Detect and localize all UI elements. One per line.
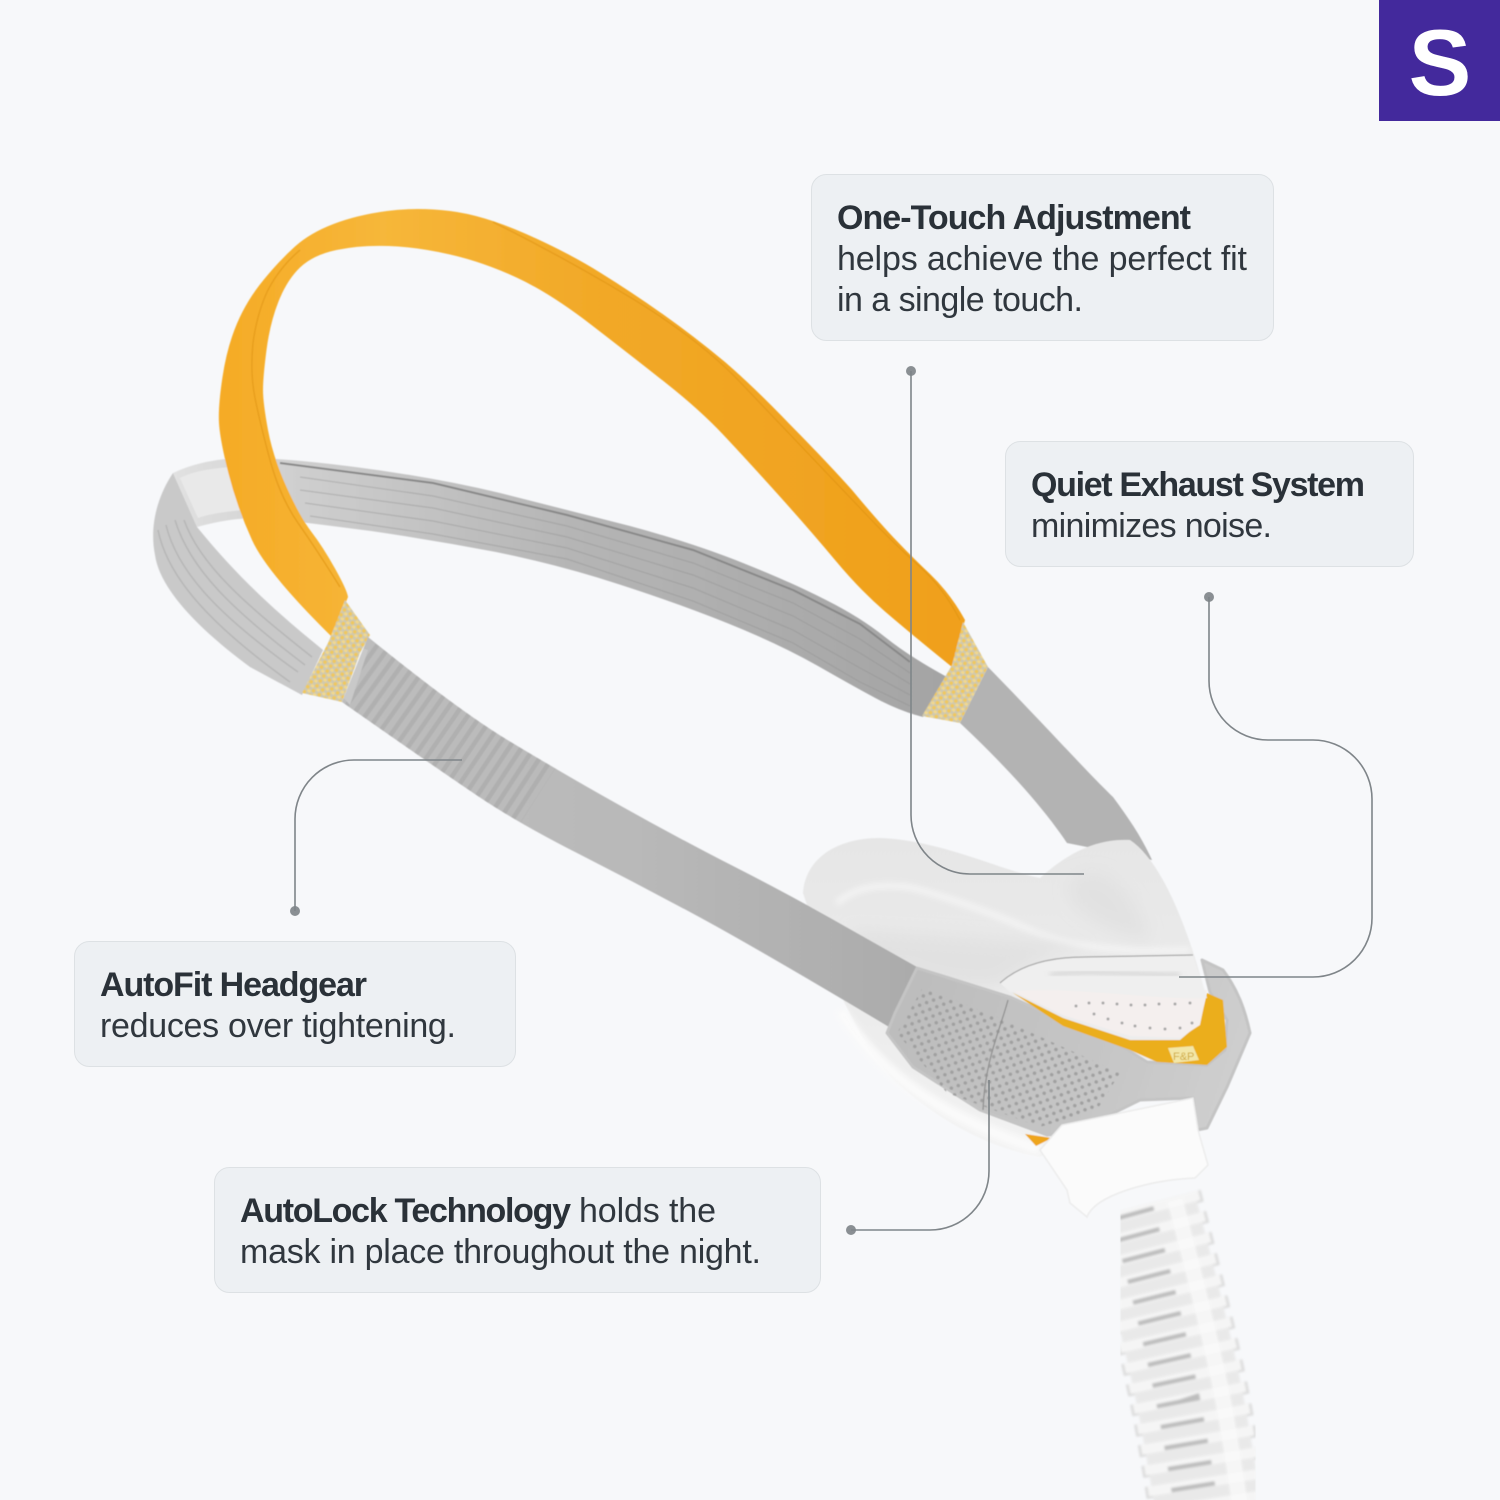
callout: autolock technology: holds the <box>579 1192 716 1230</box>
illustration: nasal mask with headgear <box>153 209 1250 1500</box>
connector: quiet exhaust system <box>1179 592 1372 977</box>
callout: one-touch adjustment: helps achieve the perfect fit <box>837 240 1248 278</box>
logo badge: S <box>1409 10 1471 115</box>
grey left loop of headgear <box>153 473 323 695</box>
corrugated air tube <box>1132 1200 1244 1500</box>
callout: autofit headgear: reduces over tightening. <box>100 1007 456 1045</box>
clear exhaust cover <box>1000 955 1207 998</box>
yellow inner cushion <box>1013 993 1227 1065</box>
callout: one-touch adjustment <box>812 174 1274 340</box>
label on cushion <box>1168 1046 1199 1063</box>
callout: quiet exhaust system: Quiet Exhaust System <box>1031 466 1365 504</box>
knit joint left <box>302 600 370 702</box>
grey front strap <box>336 637 917 1027</box>
callout: autofit headgear <box>74 942 516 1066</box>
callout: quiet exhaust system: minimizes noise. <box>1031 507 1272 545</box>
callout: quiet exhaust system <box>1006 442 1414 566</box>
perforated mesh <box>897 987 1120 1127</box>
connector: one-touch adjustment <box>906 366 1084 874</box>
grey right strap <box>960 667 1152 860</box>
logo badge <box>1379 0 1500 121</box>
callout: autolock technology <box>214 1168 820 1292</box>
grey soft clip with mesh <box>887 960 1250 1135</box>
knit joint right <box>922 622 988 723</box>
connector: autolock technology <box>846 1080 989 1235</box>
tube collar <box>1040 1098 1208 1217</box>
label on cushion: F&P <box>1173 1051 1194 1063</box>
orange tab under clip <box>1025 1134 1052 1146</box>
callout: one-touch adjustment: One-Touch Adjustment <box>837 199 1191 237</box>
white nasal pillow with vents <box>1010 990 1207 1038</box>
callout: autofit headgear: AutoFit Headgear <box>100 966 367 1004</box>
orange crown strap <box>219 209 965 667</box>
grey back headgear strap <box>173 458 947 717</box>
callout: autolock technology: mask in place throughout the night. <box>240 1233 761 1271</box>
clear mask cushion frame <box>803 838 1207 1157</box>
callout: one-touch adjustment: in a single touch. <box>837 281 1083 319</box>
connector: autofit headgear <box>290 760 462 916</box>
callout: autolock technology: AutoLock Technology <box>240 1192 571 1230</box>
